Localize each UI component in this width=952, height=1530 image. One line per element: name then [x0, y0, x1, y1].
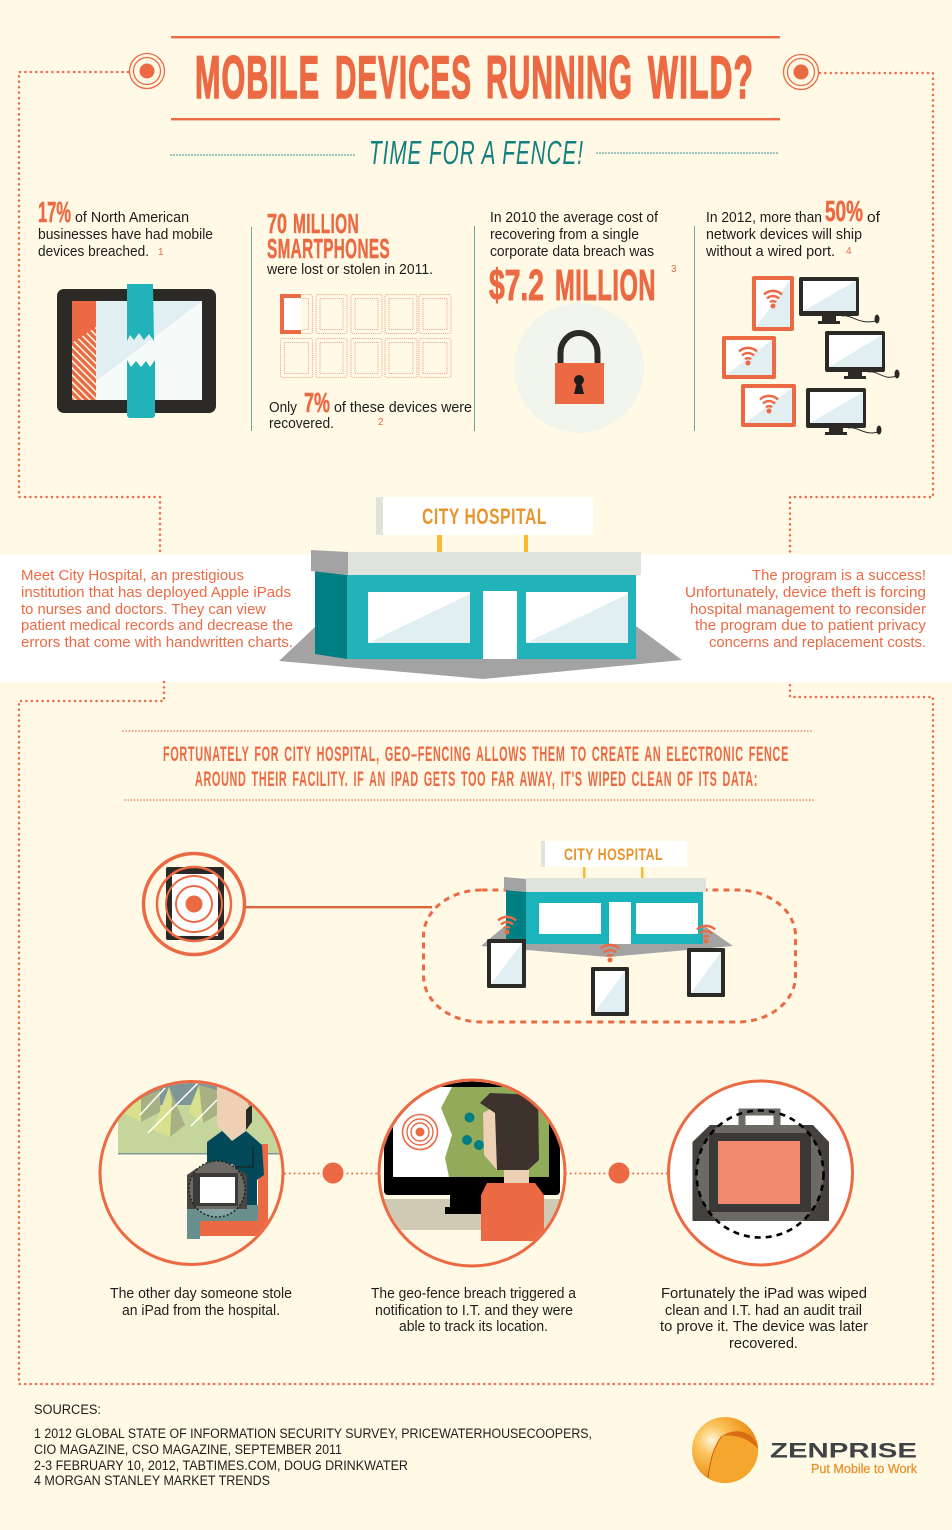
sources: 2-3 FEBRUARY 10, 2012, TABTIMES.COM, DOUG DRINKWATER — [34, 1458, 408, 1473]
step 2 caption — [371, 1286, 577, 1335]
left story text: institution that has deployed Apple iPads — [21, 585, 291, 601]
right story text — [685, 568, 927, 651]
connector line — [245, 906, 432, 908]
panel: 50% stat: of — [867, 210, 881, 226]
panel: $7.2 million stat — [489, 210, 677, 310]
step 2 caption: notification to I.T. and they were — [375, 1303, 573, 1319]
panel: 17% stat: 1 — [158, 247, 164, 258]
step 3 caption — [660, 1286, 868, 1352]
zenprise logo: Put Mobile to Work — [811, 1461, 917, 1476]
left story text: errors that come with handwritten charts. — [21, 635, 293, 651]
dotted frame: upper — [19, 72, 933, 555]
panel: 50% stat: 50% — [825, 196, 863, 228]
panel: $7.2 million stat: corporate data breach was — [490, 244, 654, 260]
left story text: to nurses and doctors. They can view — [21, 602, 267, 618]
dotted step connectors — [285, 1162, 668, 1184]
icon: right target — [784, 54, 818, 90]
sources: 1 2012 GLOBAL STATE OF INFORMATION SECURITY SURVEY, PRICEWATERHOUSECOOPERS, — [34, 1426, 592, 1441]
geofence diagram: CITY HOSPITAL — [564, 845, 663, 864]
panel: $7.2 million stat: 3 — [671, 264, 677, 275]
icons: wifi tablets — [722, 276, 796, 427]
panel: 70 million stat: 7% — [304, 387, 330, 418]
dotted frame: lower — [19, 682, 933, 1384]
panel: 70 million stat: 70 — [267, 208, 287, 239]
panel: 70 million stat: Only — [269, 400, 298, 416]
title block: WILD? — [648, 44, 754, 111]
left story text: Meet City Hospital, an prestigious — [21, 568, 244, 584]
step 3 caption: clean and I.T. had an audit trail — [665, 1303, 862, 1319]
icons: wired monitors — [799, 277, 900, 435]
sources — [34, 1402, 592, 1488]
step 1 caption: an iPad from the hospital. — [122, 1303, 280, 1319]
left story text — [21, 568, 293, 651]
panel: 70 million stat: of these devices were — [334, 400, 472, 416]
title block: MOBILE — [195, 44, 320, 111]
geo-fencing headline — [123, 731, 814, 800]
right story text: The program is a success! — [752, 568, 926, 584]
panel: 50% stat: In 2012, more than — [706, 210, 822, 226]
sources: SOURCES: — [34, 1402, 101, 1417]
icon: tablet with target — [144, 854, 244, 954]
step 2 caption: able to track its location. — [399, 1319, 548, 1335]
step 1: iPad stolen illustration — [100, 1081, 288, 1264]
panel: 17% stat — [38, 197, 213, 260]
large hospital building — [279, 497, 682, 679]
panel: 17% stat: devices breached. — [38, 244, 149, 260]
step 3 caption: recovered. — [729, 1336, 798, 1352]
panel: 70 million stat: SMARTPHONES — [267, 233, 390, 264]
title block — [171, 36, 780, 120]
icon: left target — [130, 54, 164, 88]
step 3: wiped iPad illustration — [668, 1081, 852, 1265]
panel: 17% stat: of North American — [75, 210, 189, 226]
panel: $7.2 million stat: recovering from a single — [490, 227, 639, 243]
panel: 17% stat: 17% — [38, 197, 71, 229]
left story text: patient medical records and decrease the — [21, 618, 293, 634]
zenprise logo: ZENPRISE — [770, 1440, 917, 1462]
right story text: the program due to patient privacy — [695, 618, 927, 634]
step 3 caption: Fortunately the iPad was wiped — [661, 1286, 867, 1302]
panel: 17% stat: businesses have had mobile — [38, 227, 213, 243]
subtitle: TIME FOR A FENCE! — [369, 134, 584, 171]
step 1 caption: The other day someone stole — [110, 1286, 292, 1302]
panel: 50% stat — [705, 196, 881, 260]
step 2 caption: The geo-fence breach triggered a — [371, 1286, 577, 1302]
zenprise logo — [692, 1417, 917, 1483]
panel: $7.2 million stat: In 2010 the average cost of — [490, 210, 659, 226]
panel: 70 million stat: 2 — [378, 417, 384, 428]
panel: $7.2 million stat: MILLION — [555, 261, 656, 310]
icon grid: ten phones — [280, 294, 451, 378]
panel: 50% stat: without a wired port. — [705, 244, 835, 260]
panel: 70 million stat: MILLION — [293, 208, 359, 239]
step 2: IT tracking illustration — [370, 1080, 575, 1266]
panel: 50% stat: network devices will ship — [706, 227, 862, 243]
white band behind hospital — [0, 555, 952, 682]
right story text: concerns and replacement costs. — [709, 635, 926, 651]
sources: CIO MAGAZINE, CSO MAGAZINE, SEPTEMBER 2011 — [34, 1442, 342, 1457]
panel: 70 million stat — [266, 208, 472, 432]
title block: DEVICES — [335, 44, 472, 111]
panel: 50% stat: 4 — [846, 246, 852, 257]
panel: 70 million stat: were lost or stolen in 2011. — [266, 262, 433, 278]
sources: 4 MORGAN STANLEY MARKET TRENDS — [34, 1473, 270, 1488]
large hospital building: CITY HOSPITAL — [422, 504, 547, 529]
dividers — [251, 226, 695, 431]
title block: RUNNING — [486, 44, 633, 111]
step 3 caption: to prove it. The device was later — [660, 1319, 868, 1335]
panel: $7.2 million stat: $7.2 — [489, 261, 544, 310]
geofence diagram — [424, 841, 796, 1022]
right story text: Unfortunately, device theft is forcing — [685, 585, 926, 601]
icon: tablet with torn tape — [57, 284, 216, 418]
right story text: hospital management to reconsider — [690, 602, 926, 618]
panel: 70 million stat: recovered. — [269, 416, 334, 432]
step 1 caption — [110, 1286, 292, 1319]
icon: padlock — [514, 303, 644, 433]
